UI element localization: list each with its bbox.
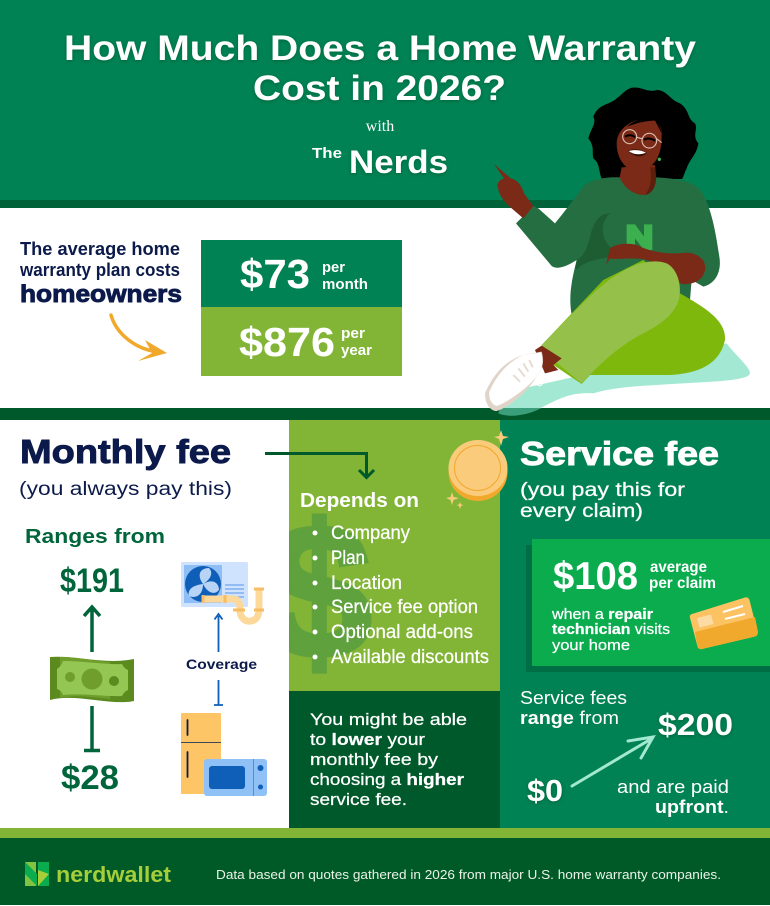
list: cost factors: Company [331, 523, 410, 544]
box: monthly cost: per [322, 259, 345, 276]
text: when a repair technician visits: when a repair [551, 606, 653, 623]
text: service fees range from: Service fees [520, 688, 627, 708]
label: average per claim: average [650, 559, 707, 576]
line: coverage down [214, 680, 223, 705]
resting arm [606, 244, 705, 284]
text: tip: to lower your [310, 730, 425, 749]
text: tip: service fee. [310, 790, 407, 809]
card shadow [526, 545, 770, 672]
box: monthly cost: month [322, 276, 368, 293]
list: cost factors: Service fee option [331, 597, 478, 618]
box: yearly cost [201, 307, 402, 376]
text: you pay this for every claim: (you pay this for [520, 480, 686, 501]
eyes [625, 135, 655, 141]
earring [658, 158, 661, 161]
panel: header background [0, 0, 770, 208]
hair fringe [627, 117, 662, 133]
mouth [628, 149, 647, 156]
box: yearly cost: year [341, 342, 372, 359]
text: paid upfront: and are paid [617, 777, 729, 797]
number: 0 dollars: $0 [527, 773, 563, 808]
icon: gold coin with sparkles [446, 430, 509, 509]
section divider band [0, 408, 770, 420]
list: cost factors: Optional add-ons [331, 622, 473, 643]
label: coverage: Coverage [186, 656, 257, 672]
heading: average plan cost: warranty plan costs [19, 260, 180, 280]
text: you pay this for every claim [520, 480, 686, 522]
title: How Much Does a Home Warranty [64, 29, 697, 68]
lime divider bar [0, 828, 770, 838]
text: when a repair technician visits: technician visits [552, 621, 670, 638]
pointing hand [494, 164, 533, 218]
box: yearly cost: per [341, 325, 365, 342]
text: paid upfront [617, 777, 729, 817]
card: average service fee [532, 539, 770, 666]
heading: ranges from: Ranges from [25, 526, 165, 548]
panel: depends on [265, 420, 500, 698]
panel: service fee [500, 420, 770, 828]
face [617, 118, 662, 172]
sweater [516, 177, 720, 315]
heading: average plan cost: homeowners [20, 281, 182, 308]
subtitle: with The Nerds: with [366, 118, 394, 135]
back leg [542, 260, 725, 384]
number: high monthly fee: $191 [60, 562, 124, 600]
floor shadow on band [498, 408, 542, 416]
subtitle: with The Nerds: Nerds [349, 144, 448, 180]
text: when a repair technician visits [551, 606, 670, 654]
front leg [542, 261, 680, 383]
arrow: up to high fee [84, 607, 100, 652]
arrow: orange curve [111, 315, 167, 361]
text: service fees range from [520, 688, 627, 728]
arrow: coverage up [214, 614, 222, 652]
heading: depends on: Depends on [300, 490, 419, 512]
floor shadow [500, 343, 750, 408]
text: tip: choosing a higher [310, 770, 464, 789]
decorative dollar sign: $ [266, 486, 372, 698]
number: 200 dollars: $200 [658, 707, 733, 742]
logo on sweater [627, 224, 652, 250]
text: tip: monthly fee by [310, 750, 439, 769]
logo: nerdwallet: nerdwallet [56, 862, 172, 887]
label: average per claim: per claim [649, 575, 716, 592]
list: cost factors [312, 523, 489, 668]
subtitle: with The Nerds [312, 118, 448, 180]
list: cost factors: Available discounts [331, 647, 489, 668]
box: yearly cost: $876 [239, 319, 335, 365]
title [64, 29, 697, 108]
neck [620, 165, 656, 195]
heading: monthly fee: Monthly fee [20, 433, 231, 470]
illustration: seated woman pointing [485, 88, 750, 416]
sweater fold [576, 213, 617, 269]
panel: lower your fee tip [289, 691, 500, 828]
ankle [535, 346, 562, 373]
source note: Data based on quotes gathered in 2026 from major U.S. home warranty companies. [216, 867, 721, 882]
text: tip: You might be able [310, 710, 467, 729]
text: you pay this for every claim: every claim) [520, 501, 643, 522]
icon: air conditioner and pipe [181, 562, 264, 621]
subtitle: with The Nerds: The [312, 145, 342, 162]
panel: average cost background [0, 208, 770, 408]
text: tip [310, 710, 467, 809]
text: you always pay this: (you always pay this) [19, 479, 232, 500]
label: average per claim [649, 559, 716, 592]
shoe [485, 352, 543, 411]
heading: average plan cost: The average home [20, 239, 180, 259]
arrow: monthly fee to depends on [265, 454, 374, 478]
heading: average plan cost [19, 239, 182, 308]
hair [588, 88, 698, 179]
list: cost factors: Location [331, 573, 402, 594]
number: low monthly fee: $28 [61, 759, 119, 797]
box: monthly cost [201, 240, 402, 307]
heading: service fee: Service fee [520, 435, 719, 472]
icon: credit card [690, 597, 758, 649]
panel: footer [0, 838, 770, 905]
text: when a repair technician visits: your home [552, 637, 630, 654]
list: cost factors: Plan [331, 548, 365, 569]
icon: refrigerator and microwave [181, 713, 267, 796]
glasses [623, 130, 662, 148]
panel: monthly fee [0, 420, 289, 828]
arrow: range [572, 737, 653, 786]
box: monthly cost: $73 [240, 251, 310, 297]
arrow: down to low fee [84, 706, 100, 750]
title: Cost in 2026? [253, 69, 506, 108]
number: 108 dollars: $108 [553, 555, 638, 598]
text: service fees range from: range from [520, 708, 619, 728]
text: paid upfront: upfront . [655, 797, 729, 817]
icon: dollar bill [50, 657, 134, 702]
